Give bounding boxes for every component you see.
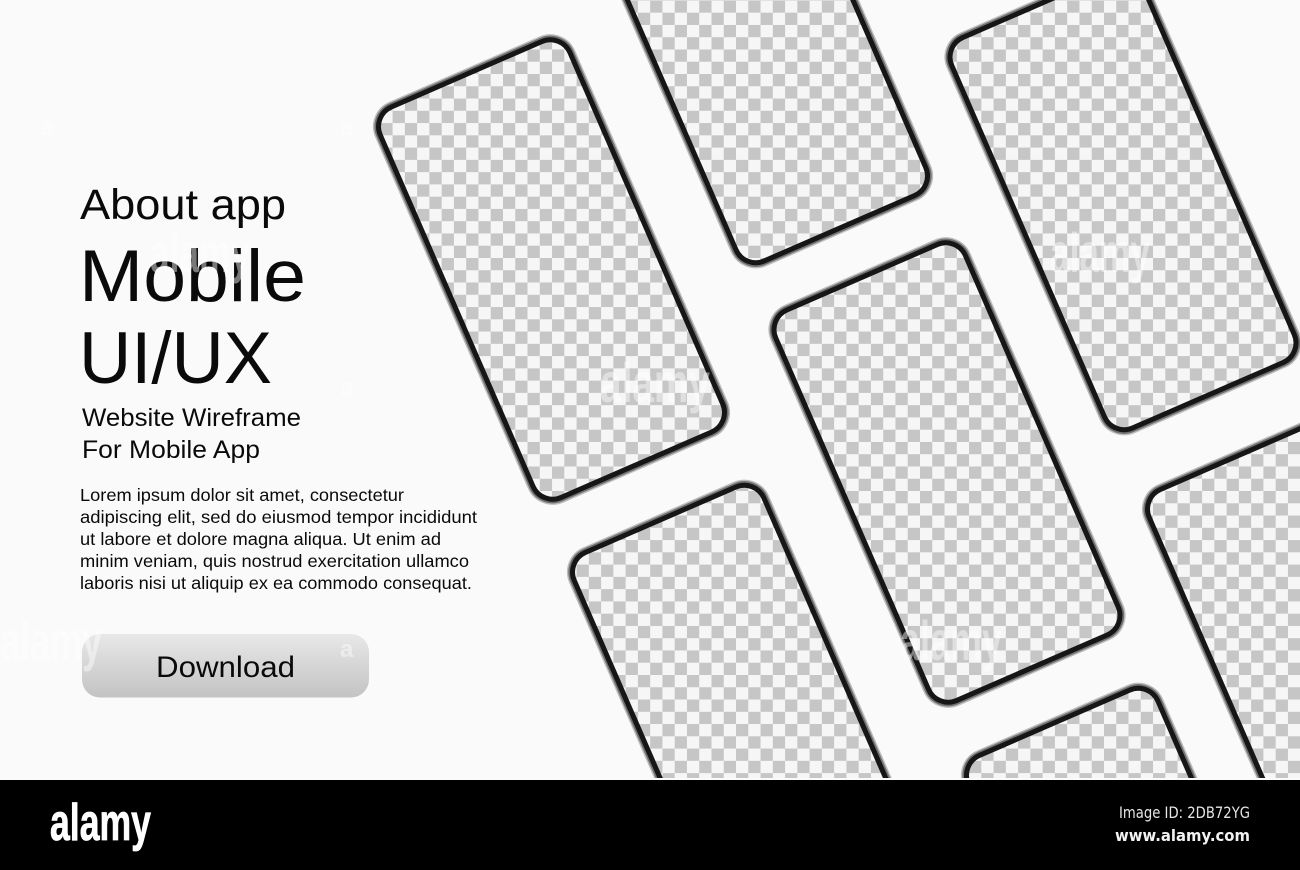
phone 1 [372,34,730,505]
heading: About app: About app [80,181,286,229]
body paragraph: laboris nisi ut aliquip ex ea commodo consequat. [80,573,472,593]
image id: Image ID: 2DB72YG [1119,803,1250,822]
watermarks: alamy [900,609,1002,672]
watermarks: alamy [150,221,250,284]
footer bar [0,780,1300,870]
watermarks [0,114,1150,672]
download button [82,634,369,698]
subheading: Website Wireframe [82,404,301,432]
phone 3 [944,0,1300,436]
body paragraph: Lorem ipsum dolor sit amet, consectetur [80,485,404,505]
phone 7 [960,682,1198,778]
phone mockups grid [372,0,1300,778]
body paragraph: adipiscing elit, sed do eiusmod tempor incididunt [80,507,477,527]
phone 4 [768,237,1126,708]
website: www.alamy.com [1115,826,1250,845]
subheading [82,404,301,464]
watermarks: alamy [1050,221,1150,284]
watermarks: a [340,114,354,141]
body paragraph: minim veniam, quis nostrud exercitation ullamco [80,551,469,571]
watermarks: a [40,114,54,141]
watermarks: a [340,374,354,401]
heading: Mobile: Mobile [79,236,306,317]
watermarks: alamy [600,351,710,414]
footer logo: alamy [50,794,151,852]
body paragraph [80,485,477,593]
watermarks: a [340,636,354,663]
body paragraph: ut labore et dolore magna aliqua. Ut enim ad [80,529,441,549]
phone 5 [566,480,892,778]
watermarks: alamy [0,609,102,672]
download button: Download [156,651,295,684]
phone 6 [1142,422,1300,778]
subheading: For Mobile App [82,436,260,464]
phone 2 [621,0,934,268]
heading: UI/UX: UI/UX [79,318,272,399]
